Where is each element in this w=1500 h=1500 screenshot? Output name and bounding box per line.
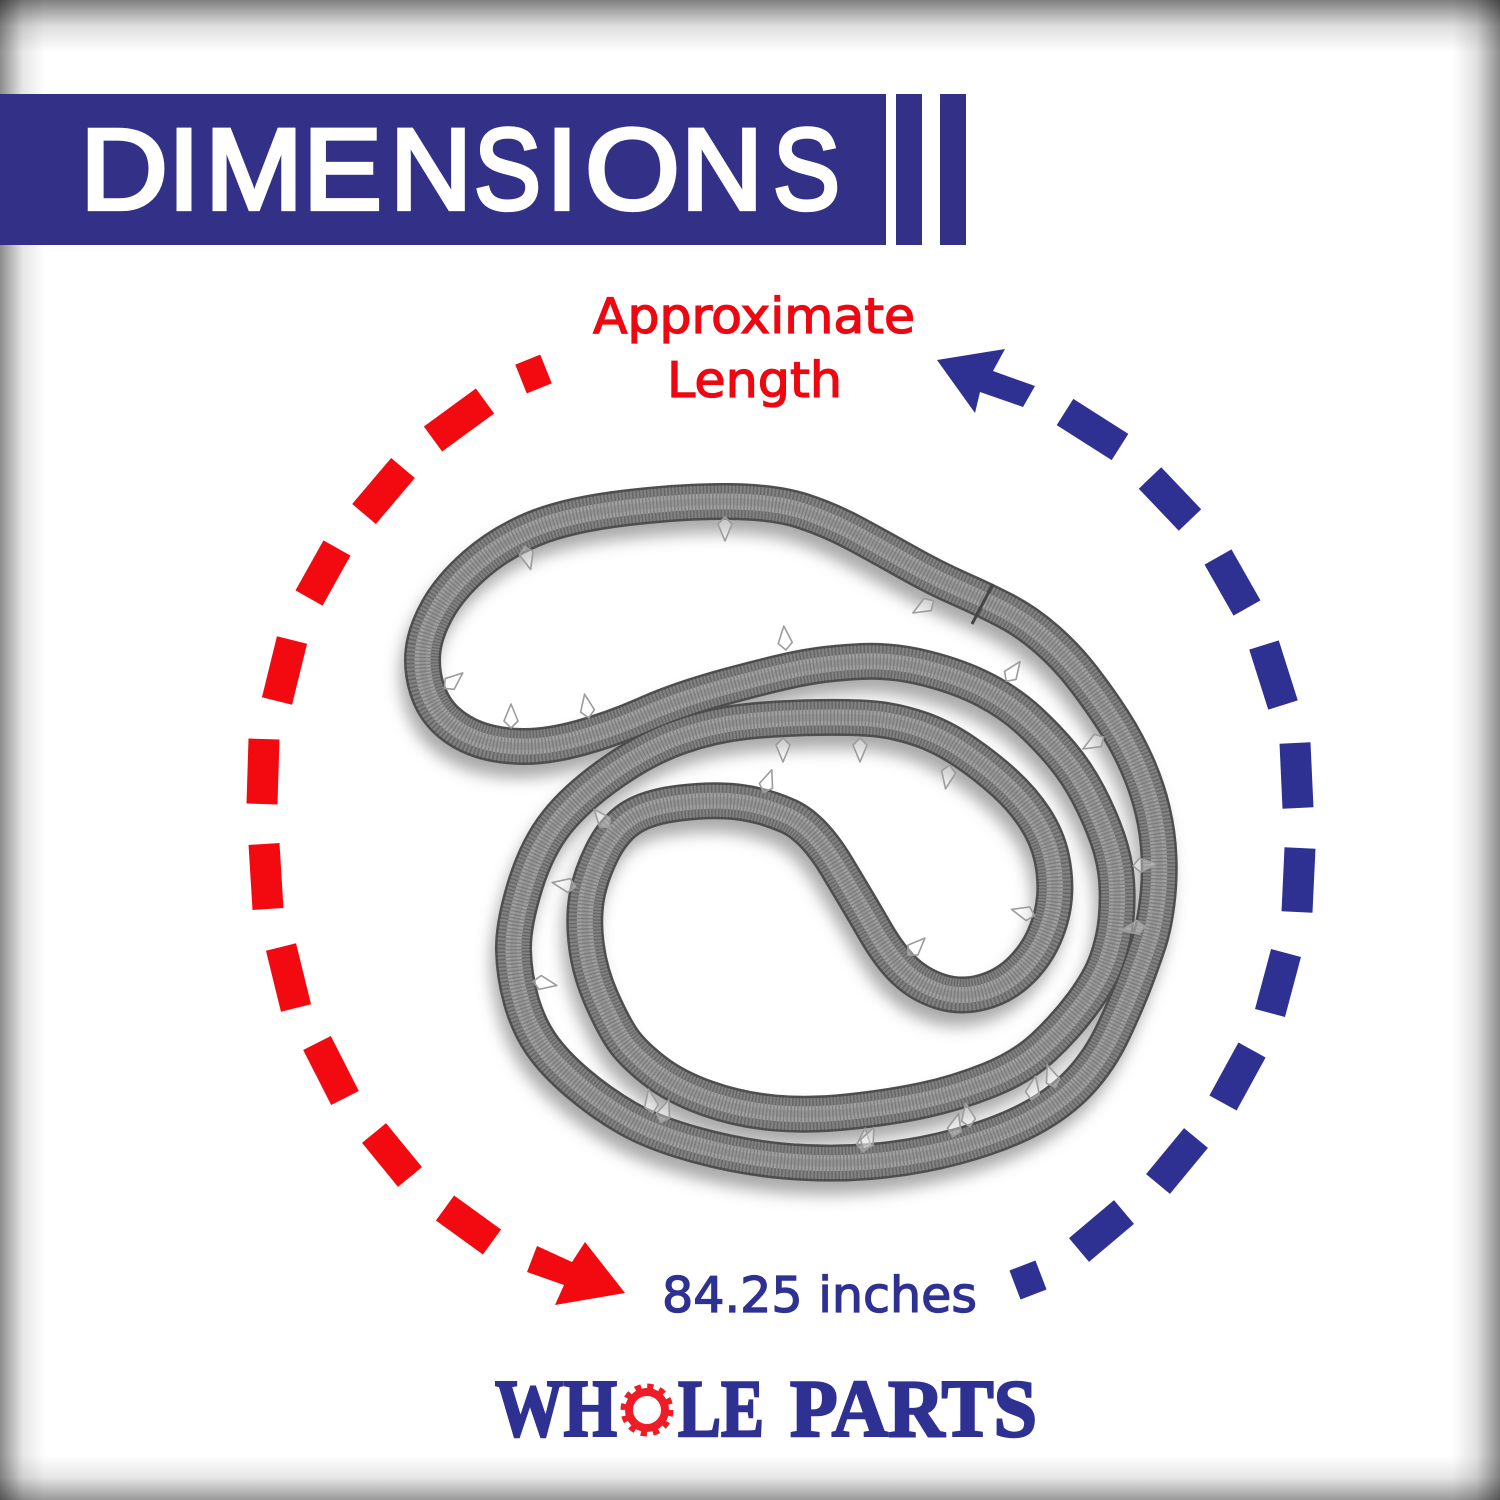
heading: dimensions: S: [474, 106, 541, 234]
retaining clips: [440, 517, 1158, 1153]
icon: gear: [623, 1386, 671, 1434]
heading: dimensions: M: [205, 106, 303, 234]
heading: dimensions: O: [585, 106, 680, 234]
heading: dimensions: E: [303, 106, 382, 234]
sleeve joint: [972, 584, 993, 624]
label: approximate length: Approximate: [593, 288, 915, 345]
heading: dimensions: I: [168, 106, 200, 234]
brand logo: whole parts: WH: [495, 1363, 617, 1454]
heading: dimensions: S: [773, 106, 840, 234]
heading: dimensions: N: [390, 106, 472, 234]
heading: dimensions: D: [80, 106, 168, 234]
title banner: [0, 94, 966, 245]
brand logo: whole parts: LE: [678, 1363, 764, 1454]
red dashed arrow arc: [262, 369, 625, 1305]
brand logo: whole parts: [495, 1363, 1037, 1454]
brand logo: whole parts: PARTS: [790, 1363, 1037, 1454]
blue dashed arrow arc: [937, 349, 1300, 1285]
label: approximate length: [593, 288, 915, 409]
heading: dimensions: N: [681, 106, 763, 234]
gasket drop shadow: [418, 515, 1154, 1177]
label: approximate length: Length: [667, 352, 842, 409]
label: 84.25 inches: 84.25 inches: [662, 1267, 977, 1324]
gasket rope: [422, 501, 1159, 1163]
heading: dimensions: [80, 106, 840, 234]
heading: dimensions: I: [546, 106, 578, 234]
